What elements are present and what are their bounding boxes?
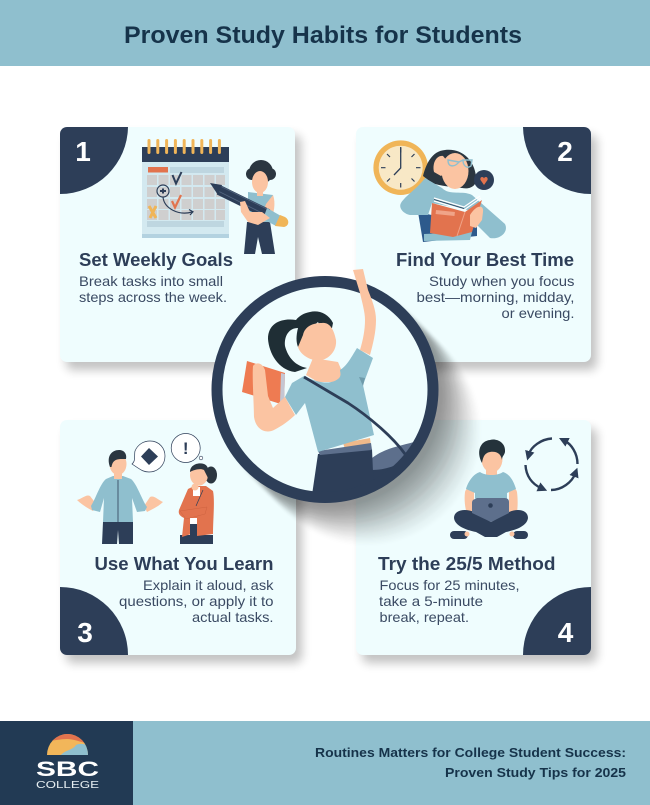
footer text xyxy=(315,745,626,780)
text: learn body: questions, or apply it to xyxy=(119,593,274,609)
footer text: Proven Study Tips for 2025 xyxy=(445,765,626,780)
text: goals body: Break tasks into small xyxy=(79,273,223,289)
icon: clock xyxy=(373,140,428,195)
number badge 2: 2 xyxy=(557,136,573,167)
text: learn body: actual tasks. xyxy=(192,609,274,625)
text: method body: Focus for 25 minutes, xyxy=(380,577,520,593)
text: method body xyxy=(379,577,520,625)
icon: reading student xyxy=(400,150,506,242)
icon: thought bubble with exclamation: ! xyxy=(183,439,189,458)
icon: sun logo xyxy=(47,734,88,755)
text: best time body: or evening. xyxy=(502,305,574,321)
panel: card 1 set weekly goals xyxy=(60,127,301,370)
number badge 1 xyxy=(60,127,128,194)
number badge 1: 1 xyxy=(75,136,91,167)
icon: speech bubble with diamond xyxy=(132,441,165,472)
ring xyxy=(217,282,433,498)
number badge 3: 3 xyxy=(77,617,93,648)
text: learn body xyxy=(119,577,275,625)
logo subtext: COLLEGE xyxy=(36,779,99,791)
footer text: Routines Matters for College Student Success: xyxy=(315,745,626,760)
text: best time body: Study when you focus xyxy=(429,273,574,289)
heading: try the 25/5 method: Try the 25/5 Method xyxy=(378,554,556,574)
panel: central circle with student xyxy=(217,269,479,544)
heading: use what you learn: Use What You Learn xyxy=(94,554,274,574)
footer band xyxy=(0,721,650,805)
panel: card 4 try the 25/5 method xyxy=(356,420,597,663)
text: method body: break, repeat. xyxy=(380,609,469,625)
icon: student with pencil xyxy=(210,160,288,254)
text: method body: take a 5-minute xyxy=(379,593,483,609)
title: Proven Study Habits for Students xyxy=(124,22,522,49)
number badge 4 xyxy=(523,587,591,655)
icon: woman thinking xyxy=(179,463,217,544)
header band xyxy=(0,0,650,66)
figure: student with book xyxy=(242,311,420,495)
logo panel xyxy=(0,721,133,805)
text: best time body xyxy=(416,273,574,321)
icon: thought bubble with exclamation xyxy=(171,434,203,462)
icon: student with laptop xyxy=(450,440,528,539)
heading: set weekly goals: Set Weekly Goals xyxy=(79,250,233,270)
number badge 4: 4 xyxy=(558,617,574,648)
text: best time body: best—morning, midday, xyxy=(416,289,574,305)
logo wordmark: SBC xyxy=(36,758,99,781)
number badge 3 xyxy=(60,587,128,655)
panel: card 3 use what you learn xyxy=(60,420,302,663)
text: goals body: steps across the week. xyxy=(79,289,227,305)
icon: calendar xyxy=(142,140,229,238)
panel: card 2 find your best time xyxy=(356,127,597,370)
text: learn body: Explain it aloud, ask xyxy=(143,577,275,593)
number badge 2 xyxy=(523,127,591,194)
text: goals body xyxy=(79,273,227,305)
figure: raised arm xyxy=(353,269,376,355)
heading: find your best time: Find Your Best Time xyxy=(396,250,574,270)
icon: man explaining xyxy=(77,450,163,544)
icon: cycle arrows xyxy=(526,438,578,490)
